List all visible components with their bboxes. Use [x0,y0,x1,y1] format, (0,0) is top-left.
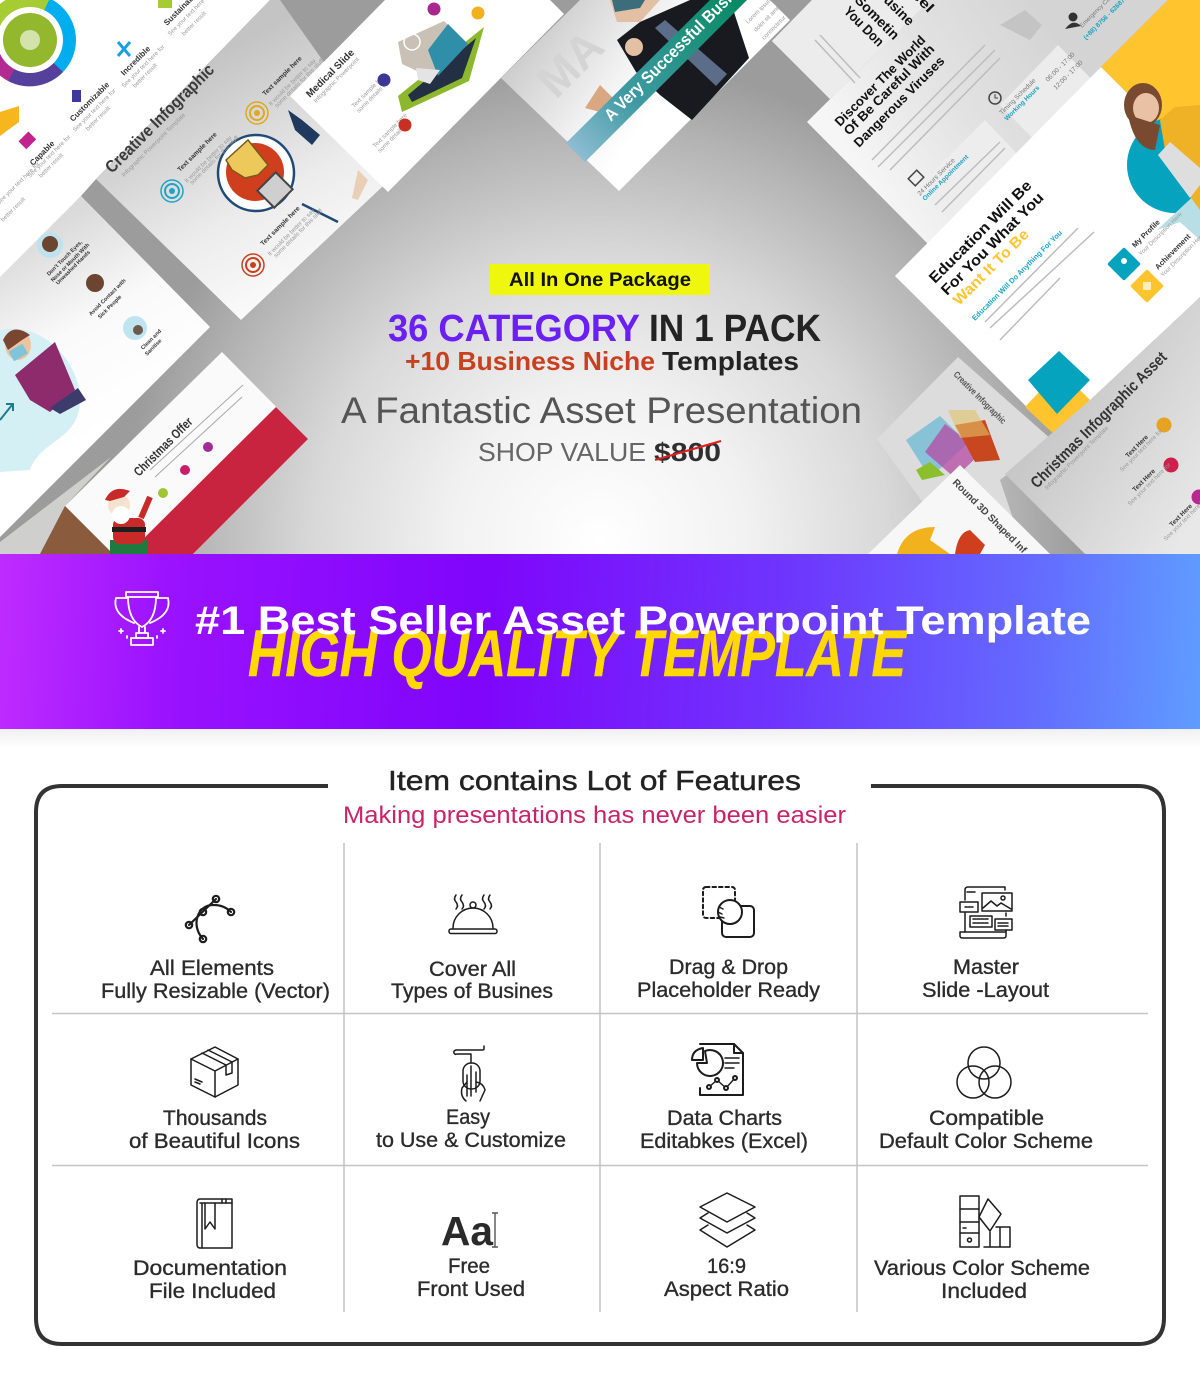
feature: documentation: File Included [149,1280,276,1303]
slide: discover the world: 06:00 - 17:00 [1044,51,1077,83]
photo: woman [1124,83,1200,240]
slide: christmas infographic asset: Christmas Infographic Asset [1028,349,1171,492]
tagline: fantastic asset presentation: A Fantastic Asset Presentation [341,390,862,431]
heading: 36 category in 1 pack [388,308,822,350]
feature: easy to use [376,1046,566,1152]
slide: very successful business [501,0,790,191]
feature: data charts [640,1044,808,1153]
slide: christmas infographic asset: Infographic Powerpoint Template [1044,425,1111,491]
feature: all elements: All Elements [150,957,274,980]
text: high quality template: HIGH QUALITY TEMPLATE [248,616,908,690]
slide: features wheel: better result [0,197,27,223]
slide: features wheel: See your text here for [121,44,166,89]
slide: very successful business: MA [526,20,614,107]
feature: aspect ratio [664,1193,789,1301]
feature: master slide: Master [953,956,1019,979]
heading: 36 category in 1 pack: 36 CATEGORY [388,308,640,350]
badge: all in one package: All In One Package [509,270,691,291]
feature: master slide: Slide -Layout [922,979,1049,1002]
slide: hygiene tips: Don't Touch Eyes, [46,239,84,277]
slide: hygiene tips: Avoid Contact with [88,278,128,317]
subheading: business niche templates [405,346,799,376]
badge: all in one package [490,264,710,295]
icon: overlapping circles [957,1047,1011,1098]
feature: compatible color scheme [879,1047,1093,1153]
feature: drag and drop: Drag & Drop [669,956,788,979]
slide: creative infographic: Text sample here [261,55,304,97]
slide: creative infographic: some details for this stuff [189,135,240,186]
slide: features wheel: better result [85,106,112,132]
slide: creative infographic small: Creative Infographic [952,369,1008,426]
slide: education: My Profile [1130,218,1162,249]
slide: discover the world: Of Be Careful With [841,41,937,138]
banner [0,554,1200,729]
slide: discover the world: 12:00 - 17:00 [1052,59,1085,91]
icon: drag hand [703,887,754,937]
slide: education: Education Will Do Anything For You [970,228,1064,322]
slide: creative infographic: Creative Infographic [101,60,218,177]
slide: creative infographic: It would be better to say [267,208,316,257]
slide: round 3d shaped [868,465,1050,556]
slide: christmas infographic asset [1005,297,1200,554]
slide: hygiene tips [0,196,210,537]
feature: all elements: Fully Resizable (Vector) [101,980,330,1003]
slide: education: For You What You [938,189,1047,299]
slide: christmas infographic asset: Text Here [1124,434,1150,459]
icon: laptop [908,170,924,186]
icon: isometric hospital [398,21,484,112]
feature: free font: Front Used [417,1278,525,1301]
slide: education: Achievement [1153,232,1193,271]
feature: data charts: Data Charts [667,1107,782,1130]
slide: education: Want It To Be [950,226,1033,309]
heading: item contains lot of features: Item contains Lot of Features [388,765,801,796]
slide: creative infographic: Text sample here [176,131,219,173]
slide: discover the world: 24 Hours Service [916,157,957,197]
slide: hygiene tips: Unwashed Hands [55,250,92,286]
slide: christmas infographic asset: See your text here for [1119,428,1164,473]
feature: free font [417,1208,525,1301]
heading: 36 category in 1 pack: IN 1 PACK [649,308,822,350]
slide: hygiene tips: Sick People [97,294,123,320]
feature: free font: Free [448,1255,490,1278]
hero text block [341,264,862,467]
icon: achievement badge [1130,269,1164,303]
slide: creative infographic: some details for this stuff [274,58,325,109]
slide: creative infographic: Text sample here [259,205,302,247]
diamonds [1025,351,1090,437]
icon: chart document [692,1044,743,1095]
feature: documentation [133,1199,287,1303]
icon: hand on mouse [454,1046,485,1101]
slide: discover the world: Working Hours [1003,84,1042,122]
icon: trophy illustration [218,135,294,211]
icon: stacked layers [700,1193,755,1247]
feature: aspect ratio: 16:9 [707,1255,746,1278]
subheading: business niche templates: Templates [662,346,799,376]
slide: discover the world: Online Appointment [921,153,971,202]
feature: drag and drop: Placeholder Ready [637,979,821,1002]
icon: layout on laptop [960,887,1012,938]
slide: hygiene tips: Sanitise [144,338,163,357]
subheading: Making presentations has never been easier [343,802,846,829]
icon: vector curve [186,896,234,942]
slide: medical: some details for [377,120,411,154]
slide: medical: some details for [356,80,390,114]
slide: creative infographic: It would be better to say [268,58,317,107]
panel: features [36,765,1164,1344]
feature: compatible color scheme: Default Color Scheme [879,1130,1093,1153]
slide: features wheel: Incredible [119,44,153,77]
slide: medical: Text sample here [351,72,388,109]
feature: easy to use: Easy [446,1106,490,1129]
feature: all elements [101,896,330,1003]
slide: creative infographic [96,0,400,320]
slide: christmas infographic asset: Text Here [1131,468,1157,493]
feature: various color scheme: Various Color Scheme [874,1257,1090,1280]
illustration: santa [102,489,150,554]
slide: discover the world: You Don [841,3,888,49]
feature: documentation: Documentation [133,1257,287,1280]
slide: discover the world [772,0,1168,245]
icon: Aa type: Aa [441,1208,494,1254]
slide: features wheel: better result [181,11,208,37]
icon: profile badge [1107,247,1141,281]
slide: discover the world: Timing Schedule [998,77,1038,116]
slide: features wheel: See your text here for [72,88,117,133]
heading: best seller: #1 Best Seller Asset Powerpoint Template [195,599,1091,643]
slide: hygiene tips: Nose or Mouth With [50,242,92,283]
slide: features wheel: Capable [28,139,57,167]
feature: master slide [922,887,1049,1002]
photo: businessman [585,0,749,120]
slide: christmas offer: Christmas Offer [131,414,196,479]
slide: medical: Infographic Powerpoint [313,57,361,104]
slide: round 3d shaped: Round 3D Shaped Inf [950,477,1029,556]
slide: discover the world: Discover The World [832,32,928,129]
slide: education: Education Will Be [926,177,1035,287]
slide: medical: Text sample here [372,112,409,149]
slide: education [895,0,1200,437]
icon: yellow target [246,102,268,124]
slide: creative infographic: some details for this stuff [273,208,324,259]
slide: christmas infographic asset: Text Here [1168,503,1194,528]
feature: cover all: Types of Busines [391,980,553,1003]
slide: creative infographic small [877,357,1052,554]
icon: serving dome [449,895,497,934]
icon: colour swatches [960,1196,1010,1247]
feature: aspect ratio: Aspect Ratio [664,1278,789,1301]
feature: thousands of icons [129,1047,300,1153]
slide: features wheel [0,0,270,280]
icon: trophy [115,592,169,645]
feature: thousands of icons: of Beautiful Icons [129,1130,300,1153]
slide: very successful business: dolor sit amet [753,3,783,33]
slide: christmas infographic asset: See your text here for [1127,462,1172,507]
icon: red target [242,254,264,276]
shop value [478,437,721,467]
feature: cover all: Cover All [429,958,516,981]
feature: compatible color scheme: Compatible [929,1107,1044,1130]
feature: thousands of icons: Thousands [163,1107,267,1130]
subheading: business niche templates: +10 Business Niche [405,346,655,376]
feature: various color scheme [874,1196,1090,1303]
slide: features wheel: better result [132,63,159,89]
feature: various color scheme: Included [941,1280,1027,1303]
slide: creative infographic: It would be better to say [184,135,233,184]
icon: person [1065,12,1081,29]
slide: creative infographic: Infographic Powerpoint Template [121,112,188,178]
slide: christmas offer [0,352,308,554]
hero panel: slide collage [0,0,1200,556]
slide: features wheel: better result [38,153,65,179]
feature: easy to use: to Use & Customize [376,1129,566,1152]
illustration: masked man [0,330,86,420]
feature: cover all [391,895,553,1003]
slide: features wheel: Customizable [68,80,112,123]
shop value: $800 [654,437,721,467]
feature: data charts: Editabkes (Excel) [640,1130,808,1153]
icon: teal target [161,180,183,202]
icon: clock [989,92,1001,104]
slide: discover the world: Dangerous Viruses [851,53,947,150]
slide: medical: Medical Slide [304,47,357,100]
slide: features wheel: See your text here for [27,134,72,179]
icon: package box [191,1047,238,1097]
feature: drag and drop [637,887,821,1002]
slide: education: Your Description Here [1138,211,1184,257]
slide: very successful business: consectetur [761,15,787,41]
slide: hygiene tips: Clean and [140,329,163,351]
shop value: SHOP VALUE [478,437,646,467]
slide: medical [290,0,564,192]
icon: book with bookmark [197,1199,232,1248]
